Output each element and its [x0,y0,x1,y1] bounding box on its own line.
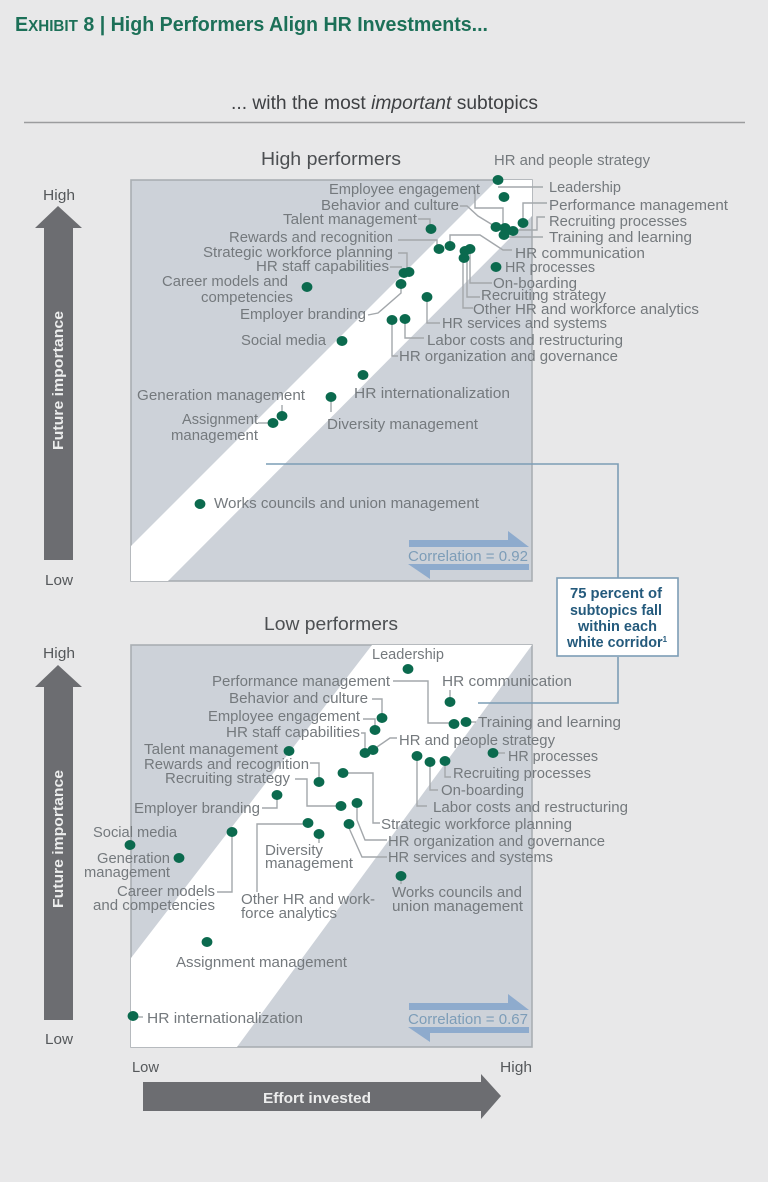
heading: high performers: High performers [261,148,401,169]
low performers labels: Leadership [372,646,444,663]
low performers labels: union management [392,898,524,915]
low performers labels: Diversity [265,842,323,859]
low performers labels: Career models [117,883,215,900]
low performers labels: HR internationalization [147,1010,303,1027]
low performers labels: Generation [97,850,170,867]
high performers labels: Labor costs and restructuring [427,332,623,349]
high performers labels: competencies [201,289,293,306]
high performers labels: Works councils and union management [214,495,480,512]
high performers leader lines [258,187,547,423]
low performers labels: force analytics [241,905,337,922]
low performers labels: Works councils and [392,884,522,901]
panel: low performers chart background [131,645,532,1047]
low performers labels: Training and learning [478,714,621,731]
high performers labels: Strategic workforce planning [203,244,393,261]
low performers labels: Social media [93,824,178,841]
high performers labels: HR processes [505,259,595,276]
high performers labels: Employer branding [240,306,366,323]
low performers labels [84,646,628,1027]
high performers labels: HR internationalization [354,385,510,402]
axis arrow: future importance, high performers: Low [45,573,74,589]
title: EXHIBIT 8 | High Performers Align HR Investments... [15,14,488,36]
high performers labels: Other HR and workforce analytics [473,301,699,318]
high performers labels: HR organization and governance [399,348,618,365]
callout: corridor share: within each [577,619,657,635]
callout: corridor share: 1 [663,635,668,644]
low performers labels: On-boarding [441,782,524,799]
axis arrow: effort invested: Low [132,1060,160,1076]
low performers labels: Labor costs and restructuring [433,799,628,816]
high performers labels: Leadership [549,179,621,196]
axis arrow: effort invested: Effort invested [263,1091,371,1107]
callout: corridor share: 75 percent of [570,586,662,602]
high performers labels: HR staff capabilities [256,258,389,275]
low performers labels: Rewards and recognition [144,756,309,773]
high performers labels: Rewards and recognition [229,229,393,246]
high performers labels: HR services and systems [442,315,607,332]
high performers labels: Diversity management [327,416,479,433]
high performers labels: On-boarding [493,275,577,292]
connector lines to callout [266,464,618,703]
high performers labels: HR and people strategy [494,152,650,169]
axis arrow: effort invested [132,1060,532,1119]
low performers labels: Assignment management [176,954,348,971]
low performers labels: Employee engagement [208,708,361,725]
low performers labels: management [84,864,171,881]
low performers labels: Recruiting processes [453,765,591,782]
low performers labels: HR services and systems [388,849,553,866]
low performers labels: HR and people strategy [399,732,555,749]
correlation arrows: low performers: Correlation = 0.67 [408,1011,528,1028]
high performers labels: Training and learning [549,229,692,246]
high performers labels: Recruiting strategy [481,287,606,304]
callout: corridor share [557,578,678,656]
low performers labels: Other HR and work- [241,891,375,908]
heading: low performers: Low performers [264,613,398,634]
correlation arrows: high performers: Correlation = 0.92 [408,548,528,565]
low performers leader lines [138,681,505,1017]
panel: high performers chart background [131,180,532,581]
high performers labels: Recruiting processes [549,213,687,230]
axis arrow: future importance, high performers: Future importance [51,311,67,450]
high performers labels [137,152,729,512]
high performers labels: Behavior and culture [321,197,459,214]
high performers labels: Performance management [549,197,729,214]
low performers labels: Strategic workforce planning [381,816,572,833]
high performers labels: management [171,427,259,444]
callout: corridor share: white corridor [567,635,664,651]
axis arrow: future importance, high performers [35,188,82,589]
low performers labels: HR processes [508,748,598,765]
low performers labels: management [265,855,354,872]
axis arrow: future importance, low performers: Low [45,1032,74,1048]
axis arrow: future importance, low performers: High [43,646,75,662]
low performers labels: Performance management [212,673,391,690]
high performers data points [195,175,528,509]
low performers labels: HR communication [442,673,572,690]
high performers labels: Employee engagement [329,181,481,198]
subtitle: ... with the most important subtopics [231,93,538,114]
low performers labels: Employer branding [134,800,260,817]
correlation arrows: low performers [408,994,529,1042]
correlation arrows: high performers [408,531,529,579]
high performers labels: Career models and [162,273,288,290]
high performers labels: HR communication [515,245,645,262]
callout: corridor share: subtopics fall [570,603,662,619]
low performers labels: Behavior and culture [229,690,368,707]
low performers labels: HR organization and governance [388,833,605,850]
low performers labels: Recruiting strategy [165,770,290,787]
high performers labels: Assignment [182,411,259,428]
axis arrow: future importance, low performers [35,646,82,1048]
low performers labels: and competencies [93,897,215,914]
low performers labels: HR staff capabilities [226,724,360,741]
axis arrow: future importance, low performers: Future importance [51,770,67,908]
axis arrow: effort invested: High [500,1060,532,1076]
axis arrow: future importance, high performers: High [43,188,75,204]
high performers labels: Social media [241,332,327,349]
high performers labels: Talent management [283,211,418,228]
low performers labels: Talent management [144,741,279,758]
low performers data points [125,664,498,1021]
high performers labels: Generation management [137,387,306,404]
